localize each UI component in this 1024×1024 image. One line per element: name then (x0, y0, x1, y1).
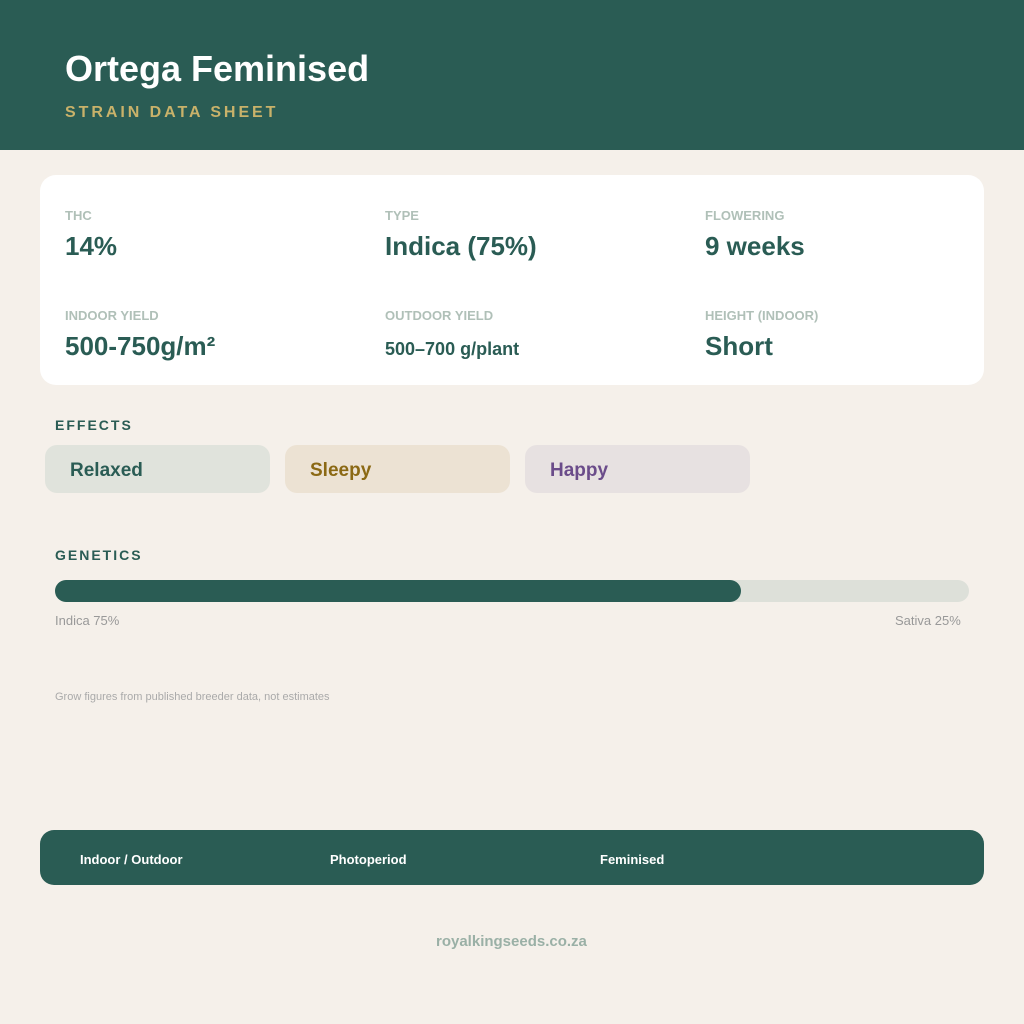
stat: THC: 14% (65, 231, 117, 261)
stat: height (705, 308, 818, 361)
stat: height: HEIGHT (INDOOR) (705, 308, 818, 323)
website: royalkingseeds.co.za (436, 933, 587, 950)
stat: flowering: 9 weeks (705, 231, 805, 261)
panel: strain stats (40, 175, 984, 385)
sativa label: Sativa 25% (895, 613, 961, 628)
feature: indoor outdoor: Indoor / Outdoor (80, 852, 183, 867)
source note: Grow figures from published breeder data, not estimates (55, 691, 330, 703)
stat: outdoor yield: OUTDOOR YIELD (385, 308, 493, 323)
effect pill: relaxed (45, 445, 270, 493)
genetics bar (55, 580, 969, 602)
feature: photoperiod: Photoperiod (330, 852, 407, 867)
stat: outdoor yield: 500–700 g/plant (385, 339, 519, 359)
feature: feminised: Feminised (600, 852, 664, 867)
effects heading: EFFECTS (55, 417, 133, 433)
effect pill: happy (525, 445, 750, 493)
footer band (40, 830, 984, 885)
stat: height: Short (705, 331, 773, 361)
stat: outdoor yield (385, 308, 519, 359)
stat: flowering: FLOWERING (705, 208, 784, 223)
stat: type: Indica (75%) (385, 231, 537, 261)
indica share (55, 580, 741, 602)
header band (0, 0, 1024, 150)
title: Ortega Feminised (65, 48, 369, 89)
effect pill: happy: Happy (550, 460, 608, 481)
effect pill: sleepy (285, 445, 510, 493)
stat: indoor yield (65, 308, 215, 361)
stat: THC (65, 208, 117, 261)
stat: THC: THC (65, 208, 92, 223)
stat: type: TYPE (385, 208, 419, 223)
effect pill: sleepy: Sleepy (310, 460, 371, 481)
stat: flowering (705, 208, 805, 261)
indica label: Indica 75% (55, 613, 119, 628)
subtitle: STRAIN DATA SHEET (65, 104, 278, 121)
stat: indoor yield: INDOOR YIELD (65, 308, 159, 323)
genetics heading: GENETICS (55, 547, 143, 563)
effect pill: relaxed: Relaxed (70, 460, 143, 481)
stat: type (385, 208, 537, 261)
stat: indoor yield: 500-750g/m² (65, 331, 215, 361)
